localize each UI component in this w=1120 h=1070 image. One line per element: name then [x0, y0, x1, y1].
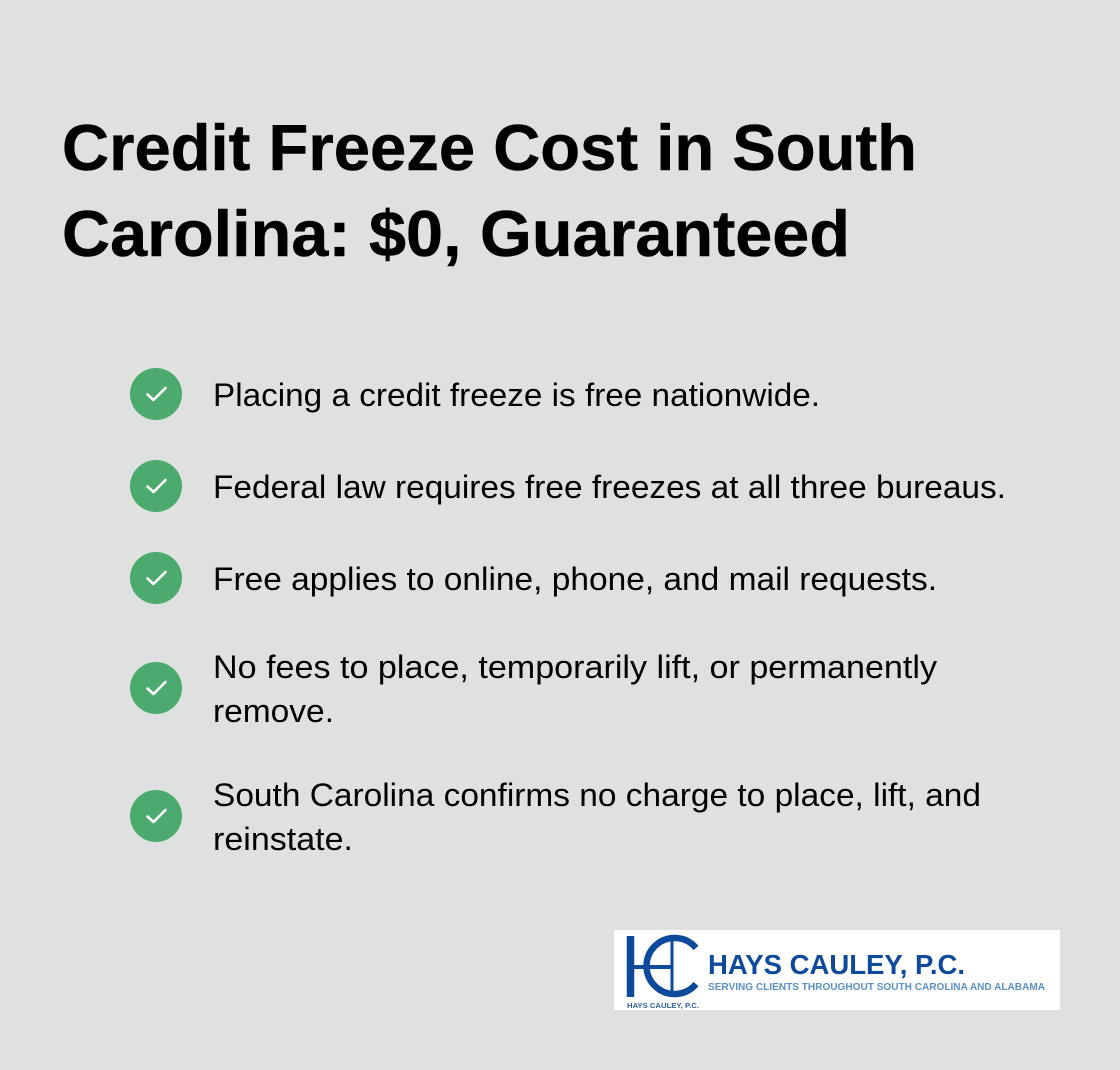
- title: [62, 111, 917, 270]
- item 4: no fees: No fees to place, temporarily lift, or permanently: [213, 649, 938, 685]
- item 5: South Carolina confirms: reinstate.: [213, 821, 353, 857]
- item 4: no fees: [130, 649, 938, 729]
- item 1: free nationwide: Placing a credit freeze is free nationwide.: [213, 377, 820, 413]
- item 3: online, phone, mail: [130, 552, 937, 604]
- logo small caption: HAYS CAULEY, P.C.: [627, 1001, 699, 1010]
- item 2: federal law: Federal law requires free freezes at all three bureaus.: [213, 469, 1006, 505]
- item 5: South Carolina confirms: South Carolina confirms no charge to place, lift, and: [213, 777, 981, 813]
- item 5: South Carolina confirms: [130, 777, 981, 857]
- icon: HC monogram: [630, 936, 696, 997]
- item 3: online, phone, mail: Free applies to online, phone, and mail requests.: [213, 561, 937, 597]
- title: Credit Freeze Cost in South: [62, 111, 917, 184]
- item 1: free nationwide: [130, 368, 820, 420]
- item 2: federal law: [130, 460, 1006, 512]
- logo tagline: SERVING CLIENTS THROUGHOUT SOUTH CAROLINA AND ALABAMA: [708, 981, 1045, 993]
- checklist: [130, 368, 1006, 857]
- title: Carolina: $0, Guaranteed: [62, 197, 850, 270]
- logo name: HAYS CAULEY, P.C.: [708, 949, 965, 980]
- logo: Hays Cauley, P.C.: [614, 930, 1060, 1010]
- item 4: no fees: remove.: [213, 693, 334, 729]
